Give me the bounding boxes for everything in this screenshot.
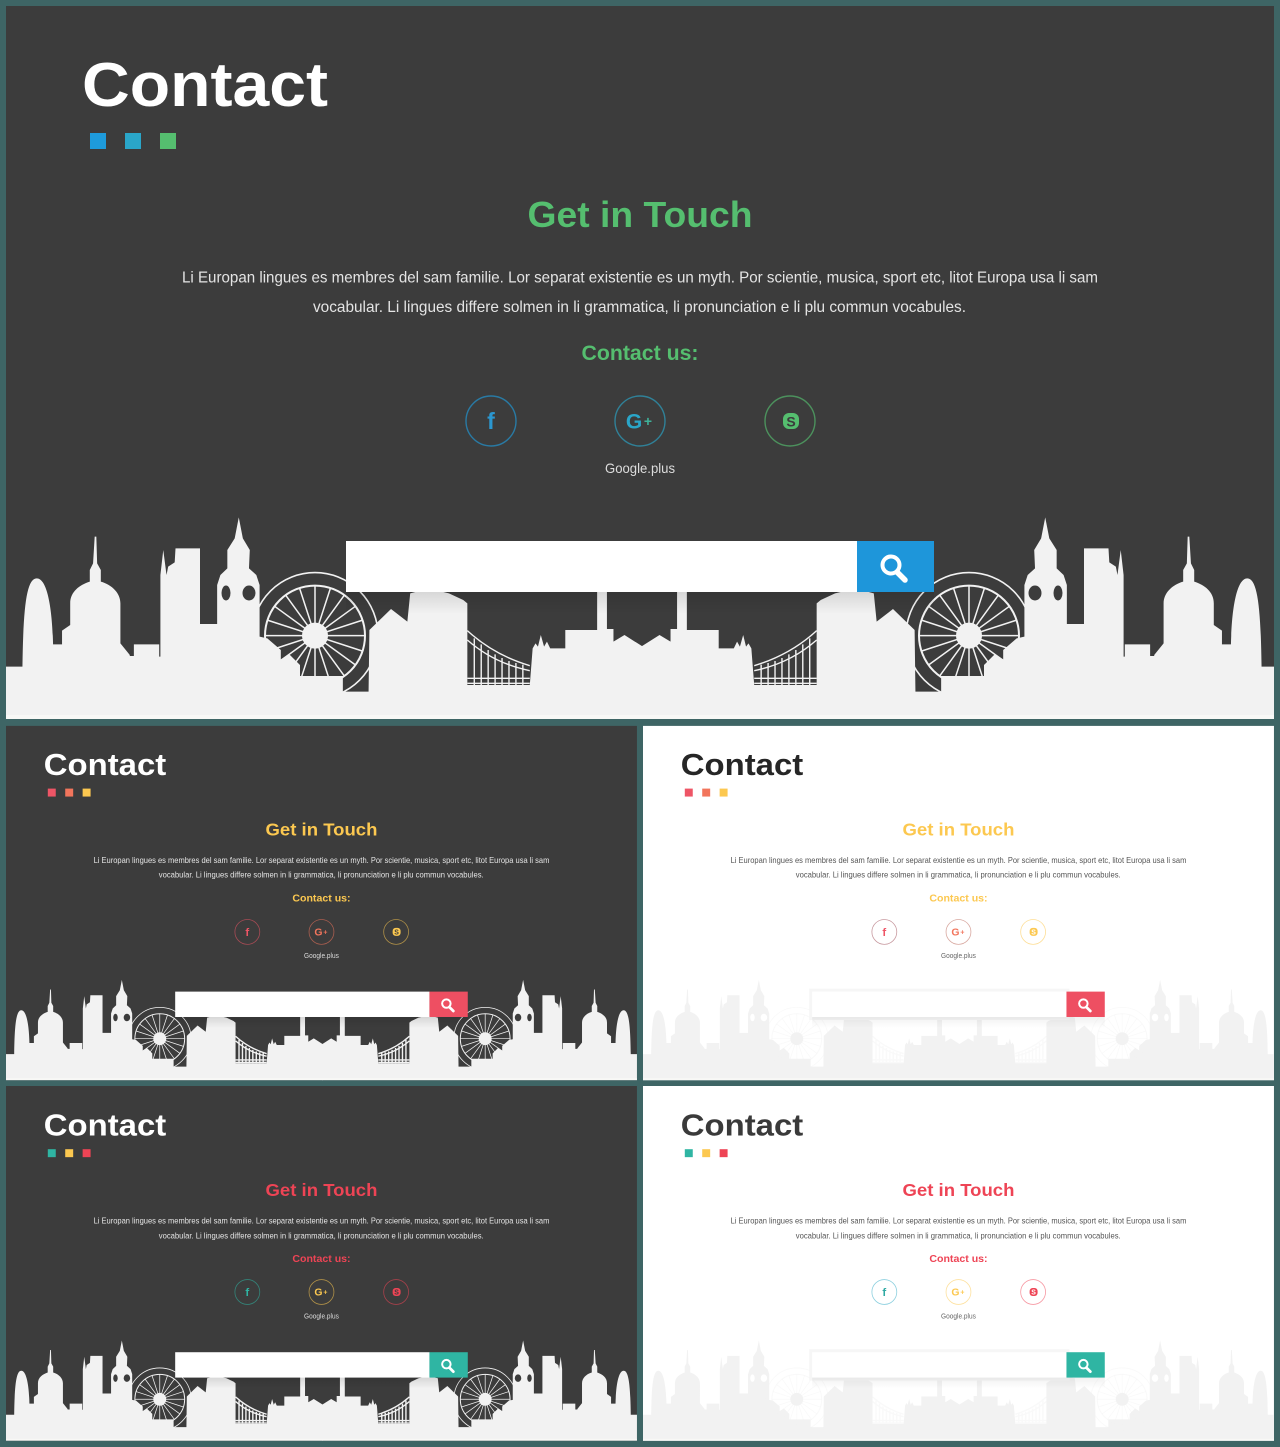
intro paragraph [731,1217,1187,1240]
icon: skype [384,919,409,944]
icon: google plus: G [951,928,960,939]
heading: Get in Touch [902,1180,1014,1200]
icon: facebook: f [882,927,886,939]
accent squares [48,789,91,797]
contact label: Contact us: [929,1254,988,1265]
icon: google plus [946,919,971,944]
skyline silhouette [5,1340,640,1441]
icon label: Google.plus [941,953,976,960]
intro paragraph: Li Europan lingues es membres del sam familie. Lor separat existentie es un myth. Por scientie, musica, sport etc, litot Europa usa li sam [94,856,550,865]
intro paragraph: Li Europan lingues es membres del sam familie. Lor separat existentie es un myth. Por scientie, musica, sport etc, litot Europa usa li sam [94,1217,550,1226]
icon label: Google.plus [304,953,339,960]
icon: facebook [466,396,516,446]
intro paragraph: vocabular. Li lingues differe solmen in li grammatica, li pronunciation e li plu commun vocabules. [159,1231,484,1240]
panel: dark red variant [5,1086,640,1441]
icon: facebook: f [882,1287,886,1299]
icon: facebook [872,919,897,944]
icon: skype: S [1031,1290,1036,1297]
title: Contact [44,747,166,782]
icon: google plus: + [644,413,652,429]
search bar [346,541,934,614]
title: Contact [681,747,803,782]
intro paragraph: vocabular. Li lingues differe solmen in li grammatica, li pronunciation e li plu commun vocabules. [796,1231,1121,1240]
icon: skype [384,1280,409,1304]
title: Contact [681,1108,803,1143]
accent squares [48,1149,91,1157]
icon: skype: S [394,930,399,937]
skyline silhouette [4,517,1280,719]
panel: light yellow variant [642,726,1277,1080]
intro paragraph: Li Europan lingues es membres del sam familie. Lor separat existentie es un myth. Por scientie, musica, sport etc, litot Europa usa li sam [731,1217,1187,1226]
icon: facebook [235,1280,260,1304]
icon: google plus: + [960,1289,964,1296]
icon: facebook: f [245,1287,249,1299]
intro paragraph: vocabular. Li lingues differe solmen in li grammatica, li pronunciation e li plu commun vocabules. [313,299,966,316]
icon: skype [1021,1280,1046,1304]
icon: facebook: f [245,927,249,939]
contact label: Contact us: [582,342,698,365]
icon: facebook [235,919,260,944]
icon: facebook: f [487,408,495,434]
intro paragraph [182,270,1098,316]
icon: google plus: G [626,410,642,434]
title: Contact [82,51,328,120]
accent squares [90,133,176,149]
contact label: Contact us: [292,894,351,905]
search bar [175,1352,468,1389]
icon label: Google.plus [605,460,675,476]
icon: google plus [309,919,334,944]
title: Contact [44,1108,166,1143]
heading: Get in Touch [265,1180,377,1200]
icon: skype: S [394,1290,399,1297]
icon: skype: S [1031,930,1036,937]
intro paragraph: vocabular. Li lingues differe solmen in li grammatica, li pronunciation e li plu commun vocabules. [796,871,1121,880]
icon: google plus [309,1280,334,1304]
heading: Get in Touch [528,194,752,235]
icon: google plus: + [323,1289,327,1296]
icon: skype: S [786,414,796,430]
icon: google plus: G [314,928,323,939]
search bar [175,992,468,1028]
icon: google plus [946,1280,971,1304]
icon label: Google.plus [941,1313,976,1320]
icon: google plus: G [314,1288,323,1299]
skyline silhouette [642,980,1277,1080]
heading: Get in Touch [265,819,377,839]
skyline silhouette [642,1340,1277,1441]
intro paragraph: Li Europan lingues es membres del sam familie. Lor separat existentie es un myth. Por scientie, musica, sport etc, litot Europa usa li sam [731,856,1187,865]
icon: facebook [872,1280,897,1304]
panel: light red variant [642,1086,1277,1441]
contact label: Contact us: [292,1254,351,1265]
panel: dark yellow variant [5,726,640,1080]
icon: google plus: G [951,1288,960,1299]
icon label: Google.plus [304,1313,339,1320]
search bar [809,1349,1105,1389]
contact label: Contact us: [929,894,988,905]
intro paragraph: vocabular. Li lingues differe solmen in li grammatica, li pronunciation e li plu commun vocabules. [159,871,484,880]
icon: skype [1021,919,1046,944]
icon: skype [765,396,815,446]
intro paragraph [94,1217,550,1240]
intro paragraph [94,856,550,880]
panel: main dark blue-green slide [4,6,1280,719]
icon: google plus: + [323,929,327,936]
icon: google plus [615,396,665,446]
accent squares [685,789,728,797]
skyline silhouette [5,980,640,1080]
accent squares [685,1149,728,1157]
heading: Get in Touch [902,819,1014,839]
intro paragraph: Li Europan lingues es membres del sam familie. Lor separat existentie es un myth. Por scientie, musica, sport etc, litot Europa usa li sam [182,270,1098,286]
icon: google plus: + [960,929,964,936]
search bar [809,989,1105,1028]
intro paragraph [731,856,1187,880]
